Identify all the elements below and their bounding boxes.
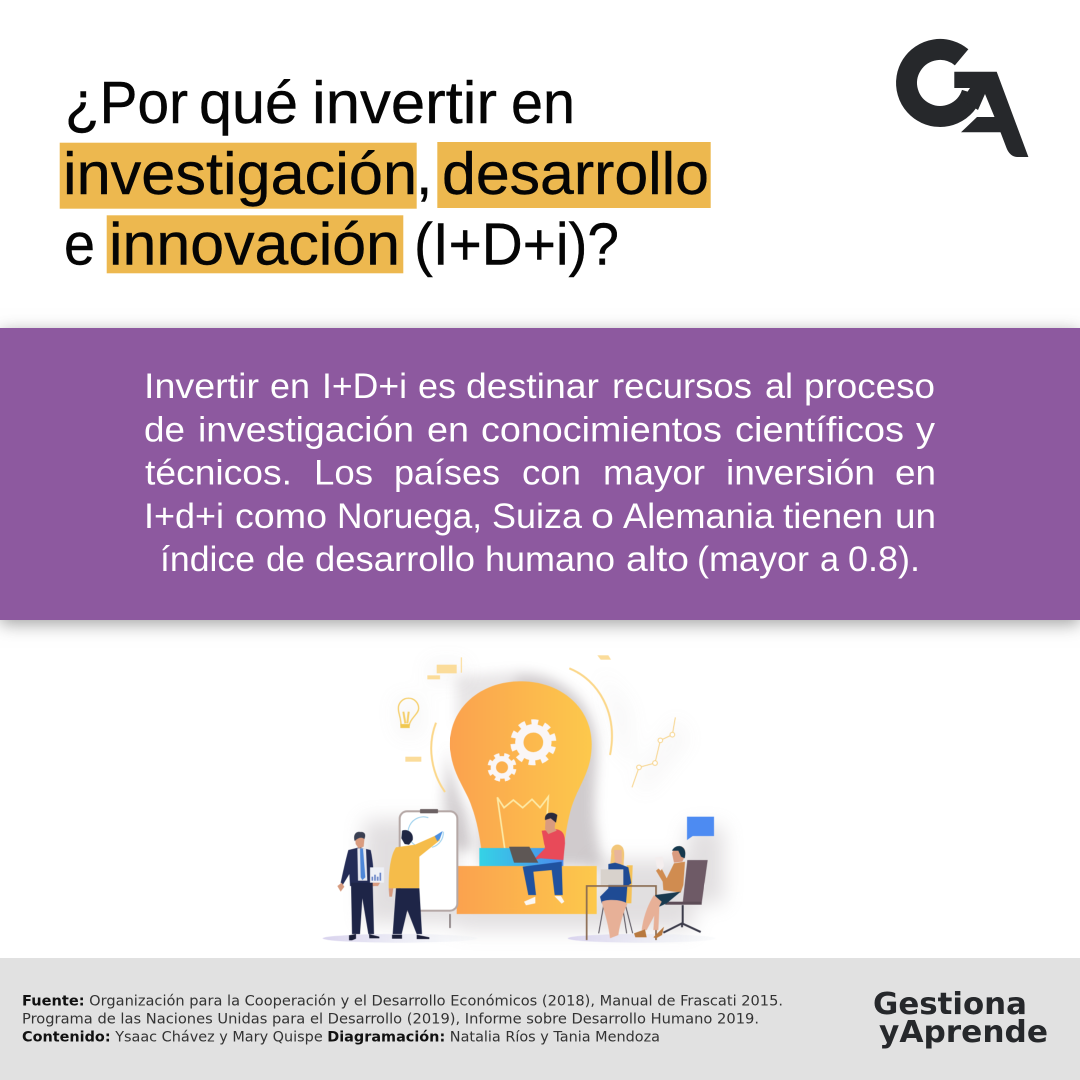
brand wordmark: yAprende [879, 1015, 1048, 1050]
soft shadows [363, 660, 723, 930]
intro text: es [418, 367, 456, 406]
whiteboard [400, 809, 457, 928]
intro text: (mayor [697, 540, 809, 579]
intro text: Suiza [492, 497, 583, 536]
person: woman at desk [587, 845, 656, 940]
floor ellipse right [568, 934, 716, 943]
person: man with laptop [509, 813, 565, 905]
logo: GA monogram [896, 38, 1028, 157]
intro text: humano [485, 540, 615, 579]
illustration: team around a giant light bulb [322, 655, 730, 943]
title: desarrollo [442, 141, 709, 207]
intro text: índice [160, 540, 255, 579]
panel: purple intro band [0, 328, 1080, 620]
intro text: en [427, 410, 469, 449]
intro text: tienen [783, 497, 883, 536]
filament [497, 797, 548, 848]
decorative arcs and icons [405, 655, 675, 792]
intro text: Los [314, 454, 373, 493]
bulb pedestal [457, 848, 597, 914]
intro text: científicos [735, 410, 904, 449]
credits: Programa de las Naciones Unidas para el Desarrollo (2019), Informe sobre Desarrollo Humano 2019. [22, 1012, 759, 1028]
intro text: destinar [466, 367, 599, 406]
person: woman in chair [634, 846, 708, 938]
intro text: conocimientos [481, 410, 722, 449]
intro text: mayor [603, 454, 705, 493]
title: en [511, 70, 575, 136]
intro text: técnicos. [145, 454, 292, 493]
gear small [488, 753, 516, 781]
intro text: de [144, 410, 185, 449]
title: , [416, 141, 432, 207]
intro text: o [591, 497, 614, 536]
gear large [510, 719, 557, 766]
intro text: I+d+i [144, 497, 224, 536]
intro text: 0.8). [848, 540, 920, 579]
title: innovación [109, 212, 400, 278]
title: investigación [63, 141, 417, 207]
credits: Fuente: Organización para la Cooperación y el Desarrollo Económicos (2018), Manual de Frascati 2015. [22, 994, 783, 1010]
intro text: alto [626, 540, 689, 579]
intro text: Invertir [144, 367, 259, 406]
intro text: y [916, 410, 936, 449]
intro text: países [394, 454, 500, 493]
person: man in suit [337, 832, 384, 940]
intro text: en [895, 454, 936, 493]
panel: footer [0, 958, 1080, 1080]
credits: Contenido: Ysaac Chávez y Mary Quispe Diagramación: Natalia Ríos y Tania Mendoza [22, 1030, 660, 1046]
speech bubble [687, 817, 714, 840]
intro text: desarrollo [315, 540, 475, 579]
intro text: recursos [612, 367, 752, 406]
intro text [144, 367, 936, 579]
title: invertir [312, 70, 497, 136]
person: man in yellow sweater [389, 830, 443, 939]
intro text: como [235, 497, 327, 536]
intro text: I+D+i [322, 367, 407, 406]
intro text: a [820, 540, 840, 579]
intro text: proceso [804, 367, 935, 406]
credits [22, 994, 783, 1046]
title: ¿Por [65, 70, 188, 136]
floor ellipse left [323, 934, 477, 943]
intro text: en [270, 367, 310, 406]
intro text: Noruega, [337, 497, 482, 536]
intro text: un [895, 497, 936, 536]
title: e [64, 212, 95, 278]
icon: small bulb [398, 698, 419, 728]
intro text: al [765, 367, 793, 406]
brand wordmark [873, 987, 1048, 1050]
intro text: Alemania [623, 497, 775, 536]
brand wordmark: Gestiona [873, 987, 1027, 1022]
intro text: con [522, 454, 581, 493]
title [60, 70, 711, 278]
intro text: de [266, 540, 305, 579]
intro text: investigación [198, 410, 414, 449]
bulb body [450, 681, 592, 853]
title: qué [199, 70, 298, 136]
title: (I+D+i)? [414, 212, 619, 278]
intro text: inversión [726, 454, 875, 493]
